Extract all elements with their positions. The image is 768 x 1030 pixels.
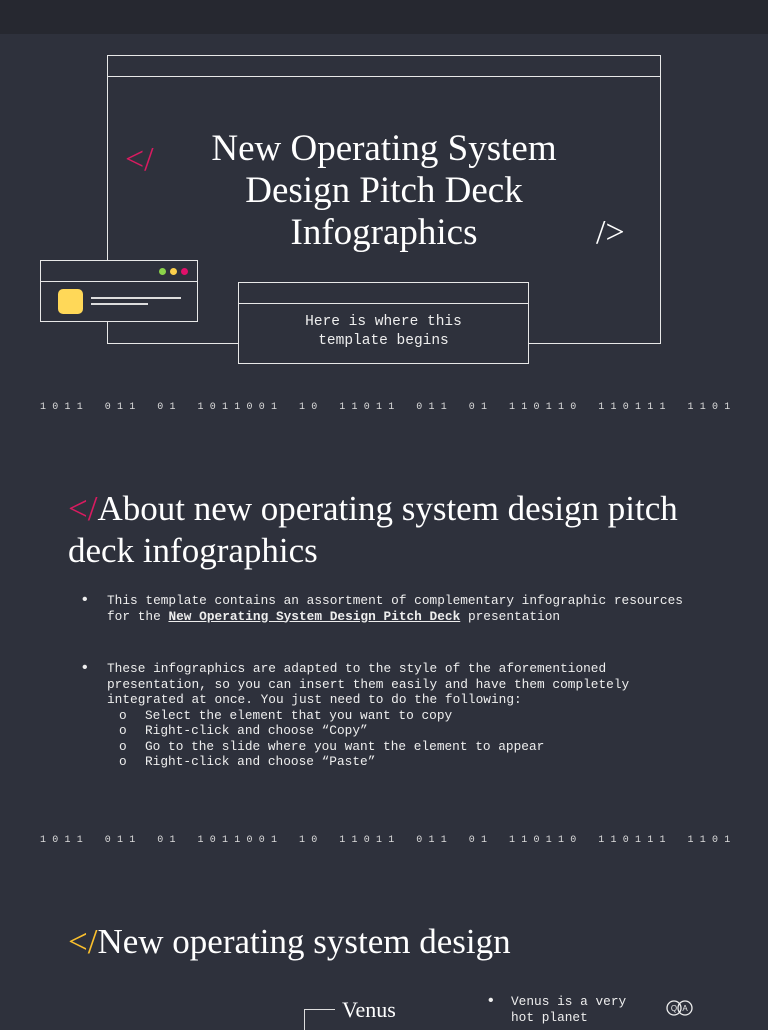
icon: Q&A: Q [671,1004,677,1013]
venus bullet text: hot planet [511,1010,588,1024]
about text: o [119,708,127,722]
main window frame [107,55,661,344]
title [211,128,557,253]
about text: Right-click and choose “Copy” [145,723,368,738]
about heading: </About new operating system design pitch [68,489,678,528]
about text: o [119,738,127,754]
venus label: Venus [342,997,396,1022]
about text: o [119,754,127,769]
subtitle box [238,282,529,364]
about text: Go to the slide where you want the element to appear [145,738,544,754]
about text [80,591,683,769]
about text: This template contains an assortment of complementary infographic resources [107,593,683,608]
title: New Operating System [211,128,557,169]
about text: • [80,591,90,609]
code tag right: /> [596,214,625,251]
venus bullet text: • [486,992,496,1010]
small window icon [40,260,198,322]
binary row 2: 1011 011 01 1011001 10 11011 011 01 110110 110111 1101 [40,835,737,846]
about text: Select the element that you want to copy [145,708,452,722]
title: Design Pitch Deck [245,170,523,211]
about text: • [80,659,90,677]
about heading: deck infographics [68,531,318,570]
venus bullet text [486,992,626,1024]
binary row 1: 1011 011 01 1011001 10 11011 011 01 110110 110111 1101 [40,402,737,413]
venus connector [304,1009,335,1030]
about text: integrated at once. You just need to do the following: [107,692,522,707]
about text: o [119,723,127,738]
title: Infographics [290,212,478,253]
icon: Q&A [666,1000,693,1016]
about text: These infographics are adapted to the style of the aforementioned [107,661,606,676]
code tag left: </ [125,141,154,178]
about text: presentation, so you can insert them easily and have them completely [107,676,629,692]
about text: for the New Operating System Design Pitch Deck presentation [107,608,560,624]
subtitle box: Here is where this [305,314,462,330]
about heading [68,489,678,570]
top bar [0,0,768,34]
subtitle box: template begins [318,333,449,349]
icon: Q&A: A [682,1004,688,1013]
venus bullet text: Venus is a very [511,994,626,1009]
about text: Right-click and choose “Paste” [145,754,375,769]
section heading: </New operating system design [68,922,511,961]
